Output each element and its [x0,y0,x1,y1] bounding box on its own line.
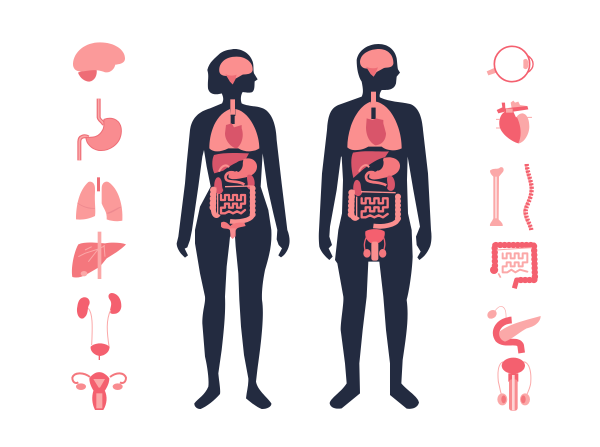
lungs [209,109,259,151]
stomach [369,157,400,179]
icon: femur bone [490,167,504,226]
cerebellum [366,67,378,77]
icon: male reproductive [497,358,531,411]
transverse colon [218,186,252,215]
icon: intestines [490,245,535,288]
small intestine [362,198,388,217]
liver [351,151,389,178]
liver [212,153,249,173]
gallbladder duct [219,165,229,172]
heart [225,123,243,149]
colon left [351,190,358,218]
left organ icons [73,42,125,221]
kidney right [247,175,255,190]
male figure [319,44,431,409]
colon left [213,187,218,216]
right organ icons [487,46,533,230]
brain [360,49,393,77]
male silhouette [319,44,431,409]
icon: eye [487,46,533,82]
abdominal organs [351,151,400,261]
colon right [373,196,398,226]
brain [219,57,253,84]
trachea [371,92,376,108]
icon: uterus [72,372,126,410]
icon: lungs [76,177,122,221]
small intestine [221,195,245,213]
colon right [230,186,253,222]
icon: kidneys and bladder [77,293,121,360]
penis [371,242,378,261]
icon: spine [524,164,532,230]
trachea [230,99,235,115]
cecum [490,266,498,274]
stomach hole [373,161,384,171]
gallbladder duct [359,165,369,172]
kidney right [387,176,395,191]
abdominal organs [212,153,257,239]
duodenum [226,172,244,185]
bronchi [231,115,235,124]
stomach [228,158,257,179]
lungs [347,102,402,150]
kidney left [353,180,362,196]
stomach hole [233,161,243,172]
icon: brain [73,42,125,82]
icon: stomach [79,99,121,160]
cerebellum [225,74,237,84]
bladder [365,229,385,244]
female figure [177,49,290,409]
icon: heart [496,101,532,143]
vagina [230,228,236,239]
icon: pancreas [486,306,541,353]
duodenum [366,172,386,185]
heart [366,118,386,145]
bronchi [371,108,376,119]
female silhouette [177,49,290,409]
transverse colon [357,192,396,218]
uterus [221,222,246,237]
kidney left [214,177,223,194]
testes [363,249,386,258]
icon: liver [72,232,126,279]
vas deferens [364,237,385,252]
